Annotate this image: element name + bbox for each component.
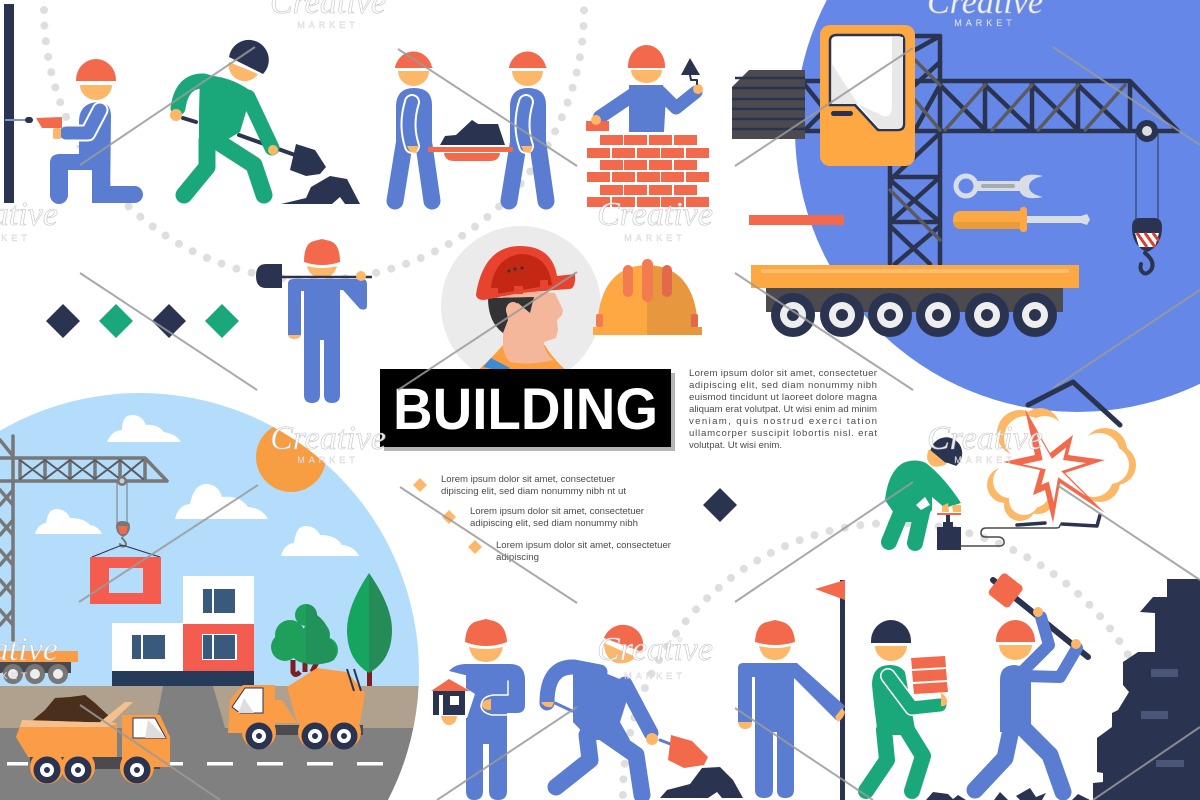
distant flatbed (0, 651, 78, 662)
text block: right paragraph: Lorem ipsum dolor sit amet, consectetuer (689, 368, 878, 379)
bricklayer with trowel and wall (586, 45, 709, 207)
text block: bullet list: Lorem ipsum dolor sit amet, consectetuer (496, 540, 672, 551)
watermarks: Creative (927, 420, 1043, 457)
worker carrying bricks (866, 620, 948, 791)
decorative diamonds row (46, 304, 239, 338)
text block: right paragraph: ullamcorper suscipit lobortis nisl. erat (689, 428, 877, 439)
watermarks: MARKET (954, 455, 1016, 465)
rubble wall (926, 579, 1200, 800)
icon: wrench (956, 175, 1043, 198)
explosion (987, 382, 1136, 526)
watermarks: Creative (270, 420, 386, 457)
text block: bullet list: Lorem ipsum dolor sit amet, consectetuer (470, 506, 645, 517)
orange accent bar (749, 215, 844, 225)
watermarks: MARKET (297, 455, 359, 465)
dump truck (16, 695, 170, 784)
crane on flatbed (732, 25, 1178, 337)
text block: right paragraph: euismod tincidunt ut laoreet dolore magna (689, 392, 878, 403)
text block: bullet list (413, 474, 672, 563)
title banner: BUILDING (393, 377, 658, 442)
worker swinging sledgehammer (975, 572, 1088, 792)
blue background circle (795, 0, 1200, 412)
watermarks: MARKET (954, 18, 1016, 28)
mixer truck (228, 668, 365, 750)
panel: construction scene (0, 390, 430, 800)
watermarks: MARKET (297, 20, 359, 30)
trees (293, 660, 318, 674)
watermarks: Creative (597, 196, 713, 233)
worker holding a house (428, 619, 525, 800)
icon: orange hard hat (593, 259, 702, 335)
watermarks: MARKET (624, 233, 686, 243)
watermarks: MARKET (624, 671, 686, 681)
text block: right paragraph: volutpat. Ut wisi enim. (689, 440, 782, 451)
worker digging with shovel (green) (170, 40, 360, 204)
text block: right paragraph (689, 368, 878, 451)
text block: bullet list: adipiscing (496, 552, 539, 563)
portrait of worker with red helmet (441, 226, 601, 369)
worker with shovel on shoulder (256, 239, 372, 403)
ground and road (0, 686, 430, 728)
distant crane (0, 436, 167, 640)
text block: right paragraph: adipiscing elit, sed diam nonummy nibh (689, 380, 877, 391)
center navy diamond (703, 488, 737, 522)
icon: screwdriver (953, 207, 1090, 232)
text block: bullet list: adipiscing elit, sed diam nonummy nibh (470, 518, 638, 529)
text block: bullet list: dipiscing elit, sed diam nonummy nibh nt ut (441, 486, 626, 497)
worker drilling a wall (4, 4, 143, 204)
two workers carrying a tray (395, 52, 547, 201)
watermarks (0, 0, 1043, 681)
hanging wall panel (90, 557, 161, 604)
text block: right paragraph: veniam, quis nostrud exerci tation (689, 416, 877, 427)
worker digging (blue) (541, 625, 743, 798)
watermarks: Creative (597, 631, 713, 668)
text block: bullet list: Lorem ipsum dolor sit amet, consectetuer (441, 474, 616, 485)
worker with flag (738, 580, 845, 800)
clouds (35, 415, 359, 556)
text block: right paragraph: aliquam erat volutpat. Ut wisi enim ad minim (689, 404, 877, 415)
worker pressing detonator (885, 435, 1060, 550)
sun (256, 422, 326, 492)
buildings (183, 576, 254, 624)
